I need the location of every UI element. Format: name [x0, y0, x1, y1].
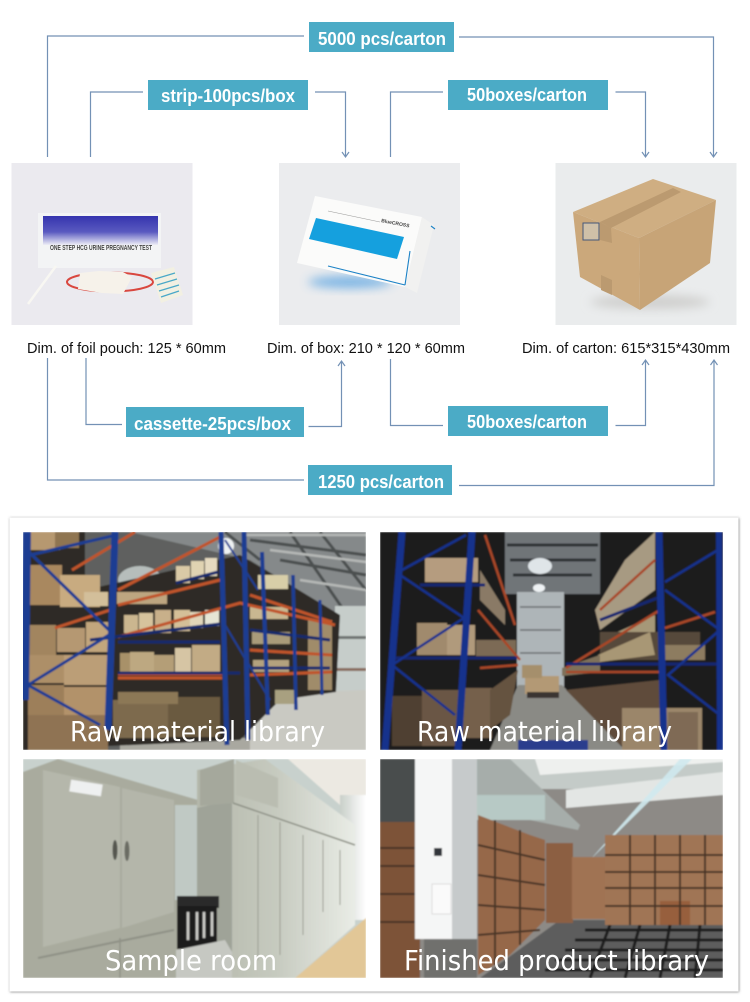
- label: 50boxes/carton bottom: 50boxes/carton: [467, 412, 587, 432]
- caption: box dimensions: Dim. of box: 210 * 120 * 60mm: [267, 341, 465, 357]
- pallet rows: [545, 925, 723, 978]
- label: 5000 pcs/carton: 5000 pcs/carton: [318, 29, 446, 49]
- photo caption: raw material library: Raw material library: [70, 715, 325, 748]
- foil pouch: [38, 213, 161, 268]
- packing tape: [600, 188, 681, 295]
- photo caption: finished product library: Finished product library: [404, 944, 709, 977]
- stacked cartons: [28, 532, 332, 750]
- photo: sample room: [23, 759, 366, 978]
- aisle back wall: [517, 592, 564, 690]
- label: strip-100pcs/box: [148, 80, 308, 110]
- brand text: BlueCROSS: [381, 218, 411, 230]
- label: cassette-25pcs/box: cassette-25pcs/box: [134, 414, 291, 434]
- dark blue shelf rails: [90, 572, 330, 673]
- label: strip-100pcs/box: strip-100pcs/box: [161, 86, 295, 106]
- caption: carton dimensions: Dim. of carton: 615*315*430mm: [522, 341, 730, 357]
- warehouse floor: [240, 690, 366, 750]
- photo: raw material library, wide view: [23, 532, 366, 750]
- aisle floor: [490, 685, 625, 750]
- label: 50boxes/carton bottom: [448, 406, 608, 436]
- label: 1250 pcs/carton: [308, 465, 452, 495]
- test strip: [28, 266, 56, 304]
- connector: 5000 pcs/carton strip route: [48, 36, 717, 157]
- wooden floor: [295, 918, 366, 978]
- label: 5000 pcs/carton: [309, 22, 454, 52]
- photo: finished product library: [380, 759, 723, 978]
- warehouse roof and wall: [118, 532, 366, 692]
- box faces: [297, 196, 434, 293]
- binders on stool: [176, 896, 232, 978]
- carton handling marks: [583, 223, 599, 240]
- carton faces: [573, 179, 716, 310]
- aisle ceiling: [505, 532, 600, 594]
- white pillar: [415, 759, 477, 978]
- product photo: cardboard carton: [556, 163, 736, 325]
- orange shelf beams: [55, 532, 335, 678]
- product photo: foil pouch with cassette: [12, 163, 192, 325]
- blue rack frames: [385, 532, 720, 750]
- connector: strip-100pcs/box route: [90, 92, 349, 157]
- product photo: retail box: [279, 163, 460, 325]
- foil pouch: ONE STEP HCG URINE PREGNANCY TEST: [50, 245, 153, 252]
- orange shelf beams: [478, 535, 715, 672]
- blue rack frames: [25, 532, 322, 745]
- panel: warehouse photo frame: [10, 518, 738, 992]
- label: 1250 pcs/carton: 1250 pcs/carton: [318, 472, 444, 492]
- dark blue shelf rails: [395, 585, 720, 664]
- warehouse floor: [480, 920, 723, 978]
- label: 50boxes/carton top: [448, 80, 608, 110]
- connector: 1250 pcs/carton cassette route: [48, 358, 718, 486]
- far cabinet run: [197, 759, 355, 978]
- blue panel: [309, 218, 404, 259]
- photo caption: sample room: Sample room: [105, 944, 277, 977]
- connector: 50boxes/carton bottom route: [390, 359, 649, 426]
- label: 50boxes/carton top: 50boxes/carton: [467, 85, 587, 105]
- ceiling beams: [380, 759, 723, 860]
- carton stacks: [380, 815, 723, 978]
- right rack cartons: [562, 532, 705, 750]
- near double-door cabinet: [23, 759, 198, 978]
- label: cassette-25pcs/box: [126, 407, 304, 437]
- pallet stack: [522, 665, 559, 698]
- photo caption: raw material library: Raw material library: [417, 715, 672, 748]
- shelving backdrop: [23, 532, 340, 750]
- left rack cartons: [392, 558, 518, 746]
- red-looped cassette: [67, 271, 153, 294]
- connector: 50boxes/carton top route: [390, 92, 649, 157]
- photo: raw material library, aisle view: [380, 532, 723, 750]
- caption: foil pouch dimensions: Dim. of foil pouch: 125 * 60mm: [27, 341, 226, 357]
- ceiling and window: [288, 759, 366, 920]
- desiccant sachet: [151, 267, 183, 303]
- connector: cassette-25pcs/box route: [86, 358, 345, 426]
